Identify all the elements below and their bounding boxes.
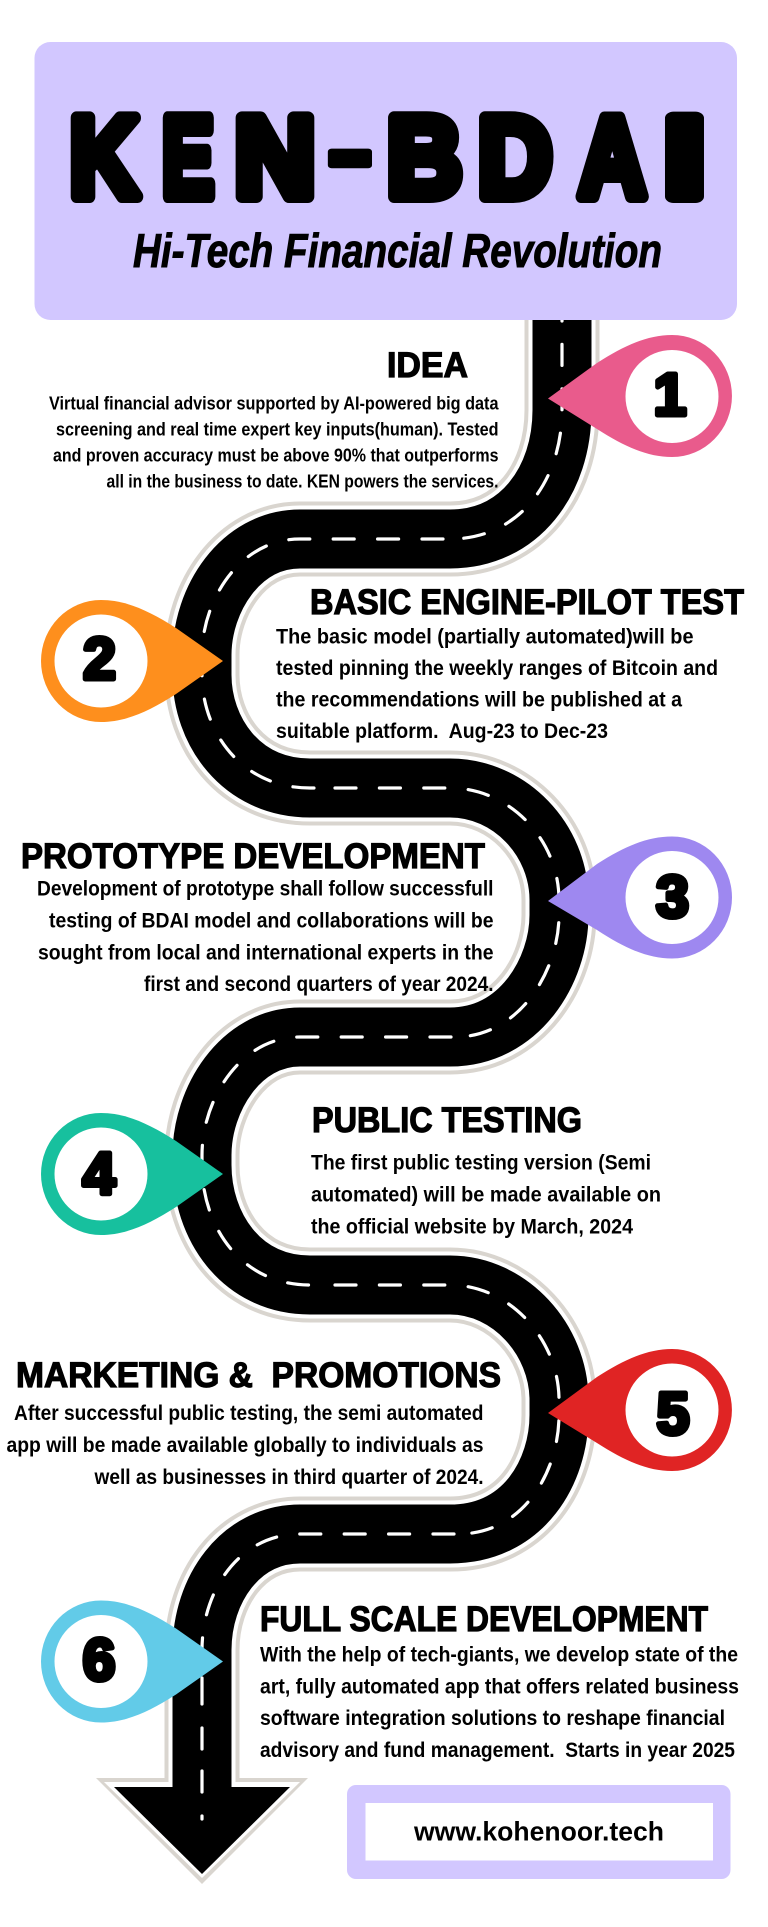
- body: basic engine pilot test: [276, 626, 718, 743]
- pin 5: 5: [657, 1381, 689, 1447]
- body: idea: and proven accuracy must be above 90% that outperforms: [53, 444, 498, 466]
- body: marketing and promotions: [6, 1402, 484, 1489]
- website box: [347, 1785, 730, 1879]
- body: full scale development: [260, 1644, 739, 1762]
- body: prototype development: [37, 878, 494, 996]
- section 2: basic engine pilot test: [276, 583, 744, 743]
- pin 3: [548, 836, 732, 958]
- pin 5: [548, 1349, 732, 1471]
- body: basic engine pilot test: The basic model (partially automated)will be: [276, 626, 694, 648]
- title: B: [387, 94, 462, 222]
- section 5: marketing and promotions: [6, 1356, 501, 1489]
- body: prototype development: testing of BDAI model and collaborations will be: [49, 910, 494, 932]
- body: basic engine pilot test: suitable platform. Aug-23 to Dec-23: [276, 720, 608, 743]
- heading: idea: IDEA: [387, 346, 468, 385]
- pin 3: 3: [656, 864, 689, 930]
- body: public testing: The first public testing version (Semi: [311, 1152, 651, 1174]
- header panel: [34, 42, 737, 320]
- body: marketing and promotions: app will be made available globally to individuals as: [6, 1434, 484, 1457]
- body: public testing: [311, 1152, 661, 1238]
- body: prototype development: first and second quarters of year 2024.: [144, 973, 494, 996]
- section 1: idea: [49, 346, 499, 492]
- pin 2: [41, 600, 223, 722]
- section 4: public testing: [311, 1101, 661, 1238]
- pin 6: [41, 1600, 223, 1722]
- winding road with arrow: [96, 299, 562, 1884]
- body: idea: screening and real time expert key inputs(human). Tested: [56, 418, 498, 440]
- section 3: prototype development: [21, 837, 494, 996]
- pin 4: 4: [83, 1141, 116, 1207]
- heading: prototype development: PROTOTYPE DEVELOPMENT: [21, 837, 485, 876]
- pin 1: 1: [654, 362, 686, 428]
- body: basic engine pilot test: the recommendations will be published at a: [276, 688, 682, 712]
- title: -: [326, 86, 374, 213]
- title: E: [162, 94, 214, 222]
- title: I: [664, 94, 706, 222]
- pin 4: [41, 1113, 223, 1235]
- body: full scale development: advisory and fund management. Starts in year 2025: [260, 1739, 735, 1762]
- heading: full scale development: FULL SCALE DEVELOPMENT: [260, 1600, 708, 1639]
- body: idea: [49, 392, 499, 492]
- body: public testing: automated) will be made available on: [311, 1184, 661, 1206]
- pin 1: [548, 335, 732, 457]
- body: full scale development: art, fully automated app that offers related business: [260, 1676, 739, 1698]
- section 6: full scale development: [260, 1600, 739, 1762]
- title: [70, 86, 706, 222]
- title: D: [478, 94, 552, 222]
- pin 6: 6: [83, 1627, 115, 1693]
- heading: marketing and promotions: MARKETING & PROMOTIONS: [16, 1356, 501, 1395]
- body: prototype development: sought from local and international experts in the: [38, 942, 494, 964]
- title: A: [578, 94, 646, 222]
- body: marketing and promotions: well as businesses in third quarter of 2024.: [94, 1466, 483, 1489]
- website url: www.kohenoor.tech: [413, 1816, 664, 1846]
- title: K: [70, 94, 139, 222]
- body: basic engine pilot test: tested pinning the weekly ranges of Bitcoin and: [276, 657, 718, 680]
- body: marketing and promotions: After successful public testing, the semi automated: [14, 1402, 484, 1425]
- body: full scale development: With the help of tech-giants, we develop state of the: [260, 1644, 738, 1666]
- pin 2: 2: [83, 626, 116, 692]
- heading: basic engine pilot test: BASIC ENGINE-PILOT TEST: [310, 583, 744, 622]
- subtitle: Hi-Tech Financial Revolution: [133, 224, 662, 277]
- body: full scale development: software integration solutions to reshape financial: [260, 1707, 725, 1730]
- body: prototype development: Development of prototype shall follow successfull: [37, 878, 494, 900]
- body: public testing: the official website by March, 2024: [311, 1216, 633, 1238]
- body: idea: all in the business to date. KEN powers the services.: [106, 470, 498, 492]
- body: idea: Virtual financial advisor supported by AI-powered big data: [49, 392, 499, 414]
- heading: public testing: PUBLIC TESTING: [312, 1101, 582, 1140]
- title: N: [234, 94, 316, 222]
